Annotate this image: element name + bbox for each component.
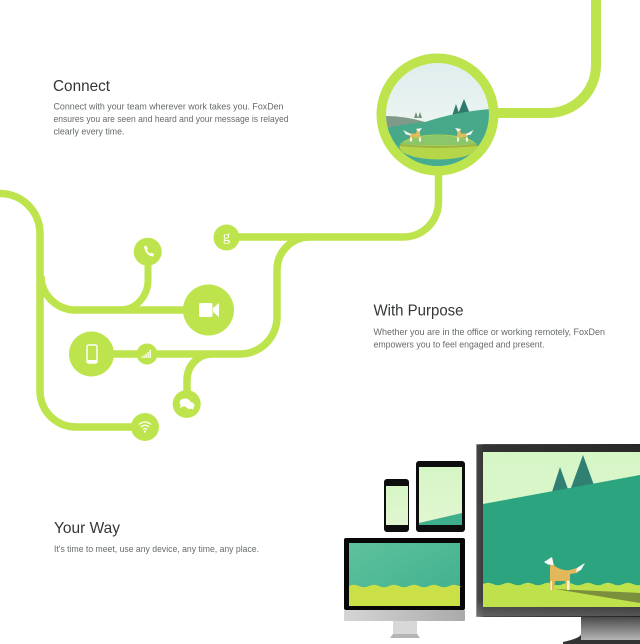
body text: Whether you are in the office or working remotely, FoxDen <box>374 326 605 337</box>
connector: left line to video node <box>41 276 209 310</box>
connector: branch to chat node <box>187 354 212 404</box>
connector: branch to phone and signal nodes <box>92 237 310 354</box>
body text <box>374 326 605 350</box>
heading: Your Way <box>54 520 120 537</box>
fox shadow <box>555 589 640 603</box>
node: signal <box>136 344 158 364</box>
connector: call node to video line <box>120 252 148 310</box>
grass <box>483 583 640 607</box>
connector: left line to wifi node <box>0 194 145 427</box>
node: video <box>183 284 234 336</box>
body text: It's time to meet, use any device, any time, any place. <box>54 543 259 554</box>
connector: scene circle to Google node <box>227 172 438 237</box>
body text <box>54 100 288 136</box>
device: tablet <box>416 461 465 532</box>
heading: Connect <box>53 78 111 95</box>
body text: clearly every time. <box>54 126 124 136</box>
device: smartphone <box>384 479 409 532</box>
device: desktop computer <box>344 538 465 638</box>
heading: With Purpose <box>374 302 464 320</box>
left fox <box>403 128 422 142</box>
body text: ensures you are seen and heard and your message is relayed <box>54 113 288 124</box>
scene circle with foxes <box>376 54 498 176</box>
node: Google: g <box>223 229 231 245</box>
device: large monitor <box>476 444 640 644</box>
node: phone call <box>134 238 162 266</box>
node: Google <box>214 224 240 250</box>
section: With Purpose <box>374 302 605 350</box>
section: Connect <box>53 78 288 136</box>
connector: top right line to scene circle <box>495 0 596 113</box>
hill <box>483 475 640 590</box>
trees <box>552 455 595 492</box>
body text: Connect with your team wherever work takes you. FoxDen <box>54 100 284 112</box>
section: Your Way <box>54 520 259 554</box>
body text: empowers you to feel engaged and present. <box>374 338 544 350</box>
node: wifi <box>131 413 159 441</box>
fox <box>544 557 585 590</box>
monitor stand <box>563 617 640 644</box>
node: chat <box>173 390 201 418</box>
node: mobile <box>69 332 114 376</box>
right fox <box>455 128 474 142</box>
